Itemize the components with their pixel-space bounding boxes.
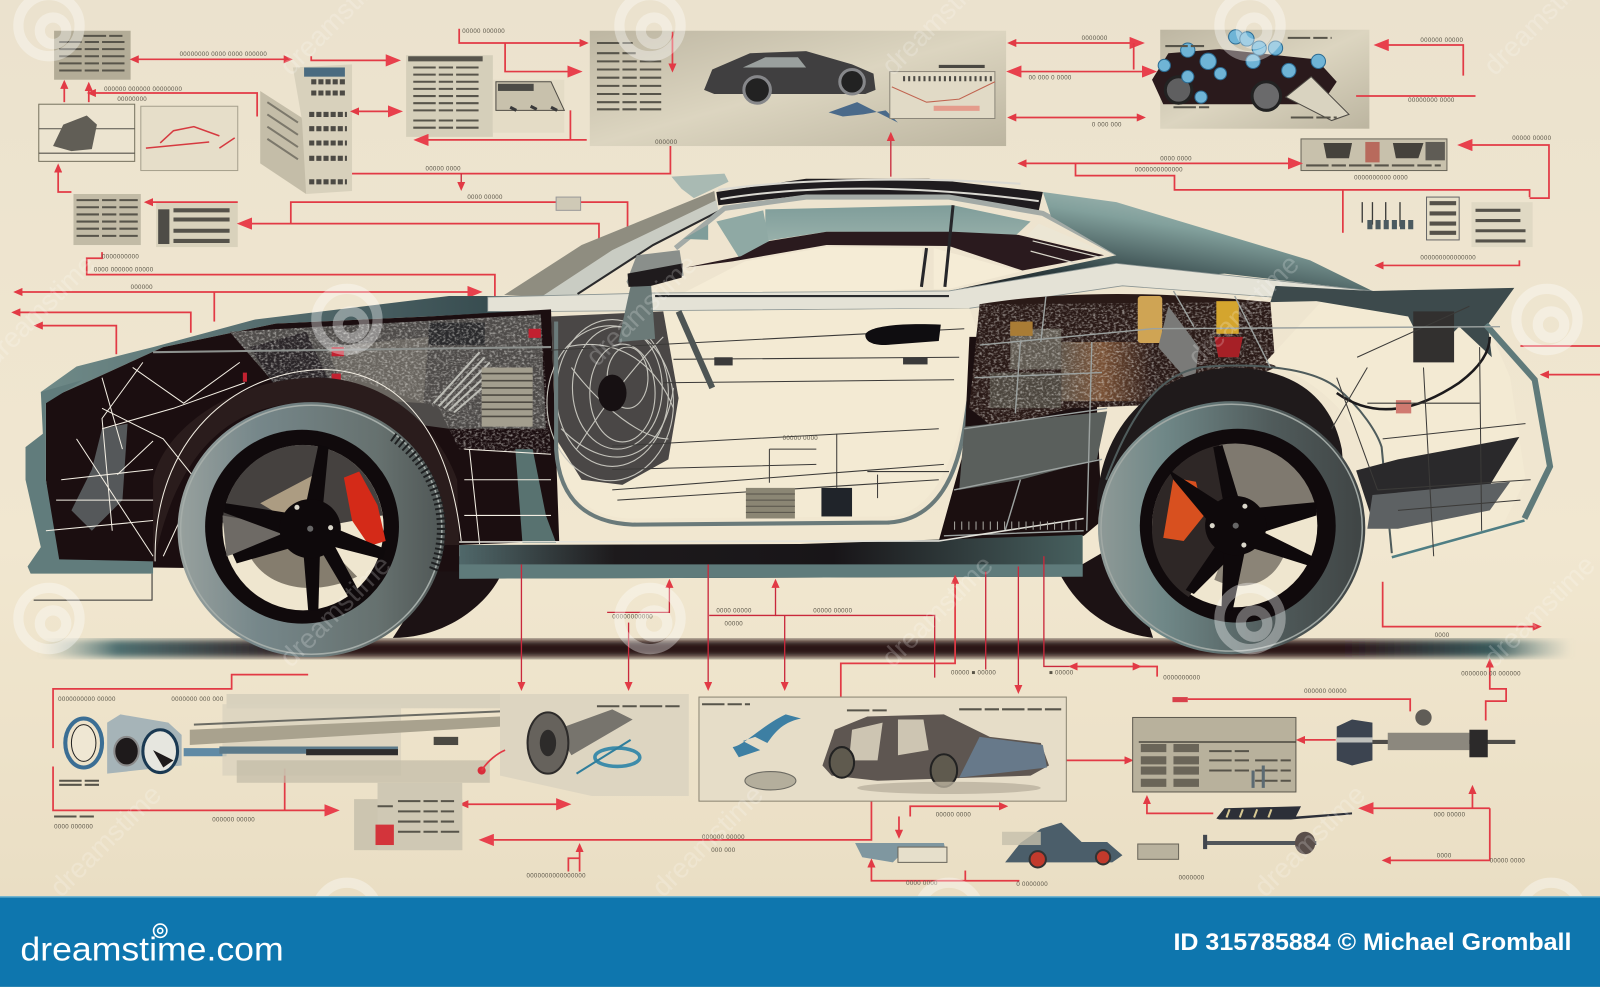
red fittings [214,329,579,454]
micro labels top: 0000000000000 [1135,167,1183,174]
rear grey band [959,411,1107,490]
tire [1098,401,1365,654]
roof highlight lines [718,180,1039,201]
micro labels bottom: 00000000000 [612,614,653,621]
small sketch [745,772,796,790]
window cream opening [673,247,922,298]
panel: wide strip [1301,139,1447,171]
micro labels top: 00000 00000 [1512,135,1552,142]
part: drive shaft [1337,709,1515,765]
micro labels bottom: 000 00000 [1434,811,1466,818]
hub [280,499,341,558]
door micro label: 00000 0000 [783,435,818,442]
mirror stem [618,284,655,342]
micro labels bottom: 0000000 [1179,875,1205,882]
micro labels top: 0000 00000 [467,194,503,201]
engine cross beam [153,347,551,352]
micro labels bottom: 000000 00000 [212,817,255,824]
micro labels bottom: 0000000000 [1163,675,1201,682]
micro labels top: 0000000000 [102,253,139,260]
micro labels top: 000000 00000 [1420,37,1463,44]
micro labels bottom: 000 000 [711,847,736,854]
panel: card with red square [354,783,462,850]
wheel bolts [1210,504,1247,548]
micro labels bottom: 00000 00000 [813,607,853,614]
part: striped key [1216,806,1352,820]
radiator block [482,367,533,427]
blue bubbles [1158,30,1326,103]
footer banner [0,896,1600,987]
logo swirl [154,924,167,937]
wheels [1165,77,1281,110]
micro labels top: 00 000 0 0000 [1029,75,1072,82]
rear bumper base line [1392,521,1524,557]
panel: car sketch [39,104,135,161]
red tag [1172,697,1188,702]
micro labels bottom: 00000 [724,621,743,628]
micro labels bottom: 0000 000000 [54,824,93,831]
rim opening [222,445,384,610]
tan pad [260,474,318,515]
engine mechanicals [230,314,551,454]
front wheel [178,402,445,657]
second window cream [934,248,1020,289]
dark car [1152,49,1337,104]
watermark text: dreamstime [1248,779,1371,902]
rear arch [1097,367,1347,510]
panel: large car diagram: 000000 [655,139,678,146]
arch panel [153,378,459,567]
panel: chart sketch [141,106,238,171]
tread teeth [393,437,441,572]
lower brake disc [250,529,357,588]
rear dark wedge [1356,437,1519,521]
panel: large car diagram [590,31,1006,146]
window dark band [686,232,1104,271]
part: grey box [1138,844,1179,859]
panel: dashboard [1133,717,1296,792]
silver arc [676,197,1116,253]
rear cargo area [969,294,1276,429]
side glass [765,205,1031,241]
cargo rail wireframe [944,291,1500,536]
part: small car [1002,823,1122,867]
micro labels bottom: 000000 00000 [702,834,745,841]
panel: long shaft panel [190,694,500,783]
upper disc [1219,444,1316,526]
micro labels bottom: 0000 [1435,632,1450,639]
red connector lines top [13,29,1600,375]
rim [1140,429,1336,623]
rim opening [1152,444,1317,607]
panel: car with blue bubbles [1152,30,1369,129]
tire [178,402,445,657]
sill top lines [459,518,1084,542]
b pillars [921,205,953,287]
watermark text: dreamstime [273,549,397,673]
car thumbnail [704,51,876,103]
door cream opening [556,308,980,518]
caliper [344,472,386,546]
spoiler tail [1270,286,1514,357]
rear wheel [1098,401,1365,654]
wireframe front [46,362,551,561]
text column [597,43,661,109]
left interior grey [222,515,310,556]
red block [1396,400,1411,413]
micro labels top [94,28,1552,291]
micro labels bottom: 0000000000000000 [527,873,586,880]
watermark text: dreamstime [44,779,167,902]
rim [205,430,399,624]
credit text: ID 315785884 © Michael Gromball [1173,929,1571,956]
micro labels top: 00000 0000 [426,166,461,173]
panel: image list [156,202,238,247]
micro labels top: 00000000 0000 0000 000000 [180,51,267,58]
spokes [1168,445,1316,610]
front bumper teal [26,380,153,574]
lower disc [1214,526,1284,586]
logo text: dreamstime.com [20,931,284,968]
rear dark lower [939,337,1112,541]
tow line [34,574,152,600]
rear wedge highlights [1031,241,1100,263]
micro labels top: 00000000 [117,96,147,103]
underfloor teal [515,449,556,543]
micro labels bottom: 0000000 000 000 [171,696,224,703]
micro labels bottom: 00000 0000 [936,811,971,818]
micro labels top: 00000000 0000 [1408,97,1455,104]
cargo grit texture [969,296,1276,429]
part: disc and spring panel [478,694,689,796]
hub [1205,496,1266,555]
panel: bar chart group [1362,197,1533,247]
engine bay dark [46,309,559,572]
blue part [829,102,898,123]
lower connector lines [53,556,1540,881]
panel: top-left text card [54,31,131,80]
micro labels top: 000000000000000 [1420,254,1476,261]
car [26,174,1550,600]
rear quarter glass [1027,224,1110,254]
micro labels bottom: 000000 00000 [1304,688,1347,695]
engine grit texture [230,311,556,454]
rear box [1413,311,1454,362]
roof band [716,179,1043,210]
micro labels top: 0000000000 0000 [1354,175,1408,182]
front mesh patch [71,424,128,531]
hood [41,296,551,400]
micro labels bottom: 0 0000000 [1016,881,1048,888]
micro labels top: 0000000 [1082,35,1108,42]
graph box [890,66,995,118]
micro labels bottom: 0000 00000 [716,607,752,614]
rear body panel [949,192,1372,306]
sedan [822,714,1049,781]
door items [714,357,928,518]
sill lower teal strip [459,564,1083,579]
watermark text: dreamstime [1477,549,1600,673]
door frame beam [556,322,980,525]
part: housing [855,843,947,862]
micro labels bottom [54,607,1525,888]
far wheels [393,541,1153,638]
micro labels bottom: 0000000 00 000000 [1461,671,1521,678]
micro labels bottom: ■ 00000 [1049,670,1074,677]
panel: isometric booklet [260,64,352,194]
roof wing [671,174,729,198]
rear quarter cream [1265,296,1526,557]
panel: big car [699,697,1066,801]
door handle [865,324,941,345]
watermark text: dreamstime [875,549,999,673]
spokes [223,445,386,610]
part: gauge rings [54,714,227,816]
coil spring [434,352,500,412]
blue swoosh [733,714,801,757]
cone [1286,77,1349,121]
watermark text: dreamstime [646,779,769,902]
part: axle [1203,832,1316,854]
watermark text: dreamstime [579,248,703,372]
micro labels bottom: 00000 0000 [1490,857,1525,864]
panel: text block left [73,194,141,245]
small teal glass [684,225,708,240]
caliper [1163,478,1204,541]
wireframe rear [1332,306,1531,556]
micro labels top: 0000 0000 [1160,155,1192,162]
upper interior dark [222,445,383,529]
left interior dark [1152,445,1235,597]
micro labels top: 00000 000000 [462,28,505,35]
rear bumper edge [1486,325,1550,518]
micro labels bottom: 0000000000 00000 [58,696,116,703]
wheel bolts [294,505,333,530]
micro labels bottom: 0000 0000 [906,880,938,887]
panel: document [406,55,493,137]
a pillar silver [541,200,718,297]
belt dark line [655,295,949,297]
belt silver band [488,263,1372,311]
a pillar outer [504,191,716,297]
bottom ribs [954,522,1082,530]
micro labels bottom: 00000 ■ 00000 [951,670,996,677]
rear cable [1337,337,1490,409]
sill [459,535,1083,579]
ground shadow [41,640,1571,657]
rear lower strip [1367,482,1510,529]
a pillar inner dark line [578,208,724,294]
door tangle [547,311,679,485]
watermark text: dreamstime [1181,248,1305,372]
micro labels top: 000000 000000 00000000 [104,86,182,93]
small connector box [556,197,581,210]
micro labels top: 000000 [131,284,153,291]
mirror [627,250,712,388]
panel: small diagram [493,80,564,133]
front triangle glass [716,210,769,257]
micro labels top: 0000 000000 00000 [94,267,154,274]
micro labels top: 0 000 000 [1092,122,1122,129]
micro labels bottom: 0000 [1437,852,1452,859]
door lines [551,329,964,500]
rear arch thin line [1106,366,1392,553]
